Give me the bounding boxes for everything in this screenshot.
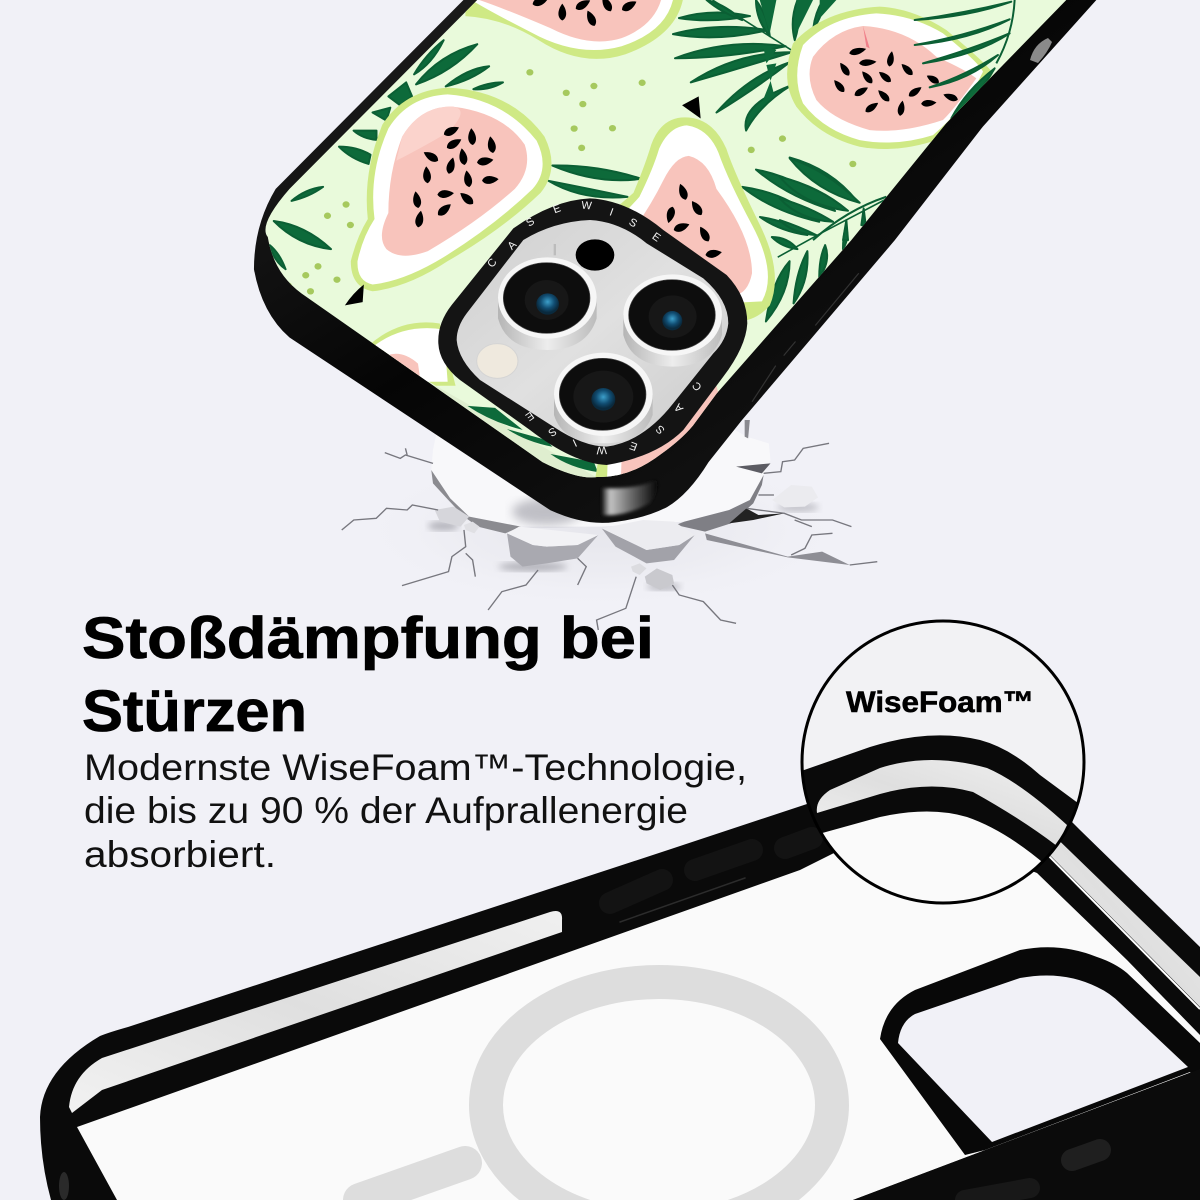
left lower port (59, 1172, 69, 1200)
top phone with patterned case (250, 0, 1120, 523)
impact highlight on phone corner (601, 480, 658, 515)
body text (84, 747, 747, 875)
body text: Modernste WiseFoam™-Technologie, (84, 747, 747, 788)
CASEWISE lettering: I (571, 436, 578, 448)
heading (82, 606, 654, 744)
illustration: cracked wall impact (342, 400, 877, 630)
phone case body (254, 0, 1096, 523)
CASEWISE lettering: W (596, 443, 607, 456)
CASEWISE lettering: S (524, 215, 537, 229)
black stems (345, 96, 701, 305)
CASEWISE lettering: W (581, 200, 593, 212)
camera plate (457, 220, 728, 447)
lens top right (623, 274, 722, 367)
callout ring (802, 621, 1084, 903)
papaya: right, with frond (760, 0, 1015, 240)
body text: absorbiert. (84, 834, 276, 875)
papaya: centre right (620, 117, 775, 320)
heading: Stürzen (82, 679, 307, 744)
dots (285, 69, 856, 295)
callout label: WiseFoam™ (846, 686, 1034, 719)
body text: die bis zu 90 % der Aufprallenergie (84, 790, 688, 831)
CASEWISE lettering: S (654, 422, 668, 436)
CASEWISE lettering: E (650, 230, 663, 244)
papaya: top (465, 0, 683, 59)
magnified case corner (804, 735, 1077, 870)
flash (477, 344, 518, 378)
bottom stripes (432, 386, 720, 482)
papaya: bottom left (369, 322, 456, 386)
bottom rim (853, 1069, 1200, 1200)
case pattern (266, 0, 1066, 478)
heading: Stoßdämpfung bei (82, 606, 654, 671)
foam window left (69, 911, 562, 1113)
zoom callout: WiseFoam (800, 620, 1086, 904)
foam window right (1040, 822, 1200, 1007)
CASEWISE lettering: E (523, 409, 536, 423)
CASEWISE lettering (485, 200, 705, 456)
port (1072, 1150, 1100, 1160)
CASEWISE lettering: A (506, 238, 520, 253)
CASEWISE lettering: A (672, 400, 686, 414)
side buttons (610, 838, 812, 922)
side button highlight (1030, 38, 1052, 63)
CASEWISE lettering: I (608, 206, 615, 219)
CASEWISE lettering: S (627, 216, 639, 230)
palm leaves (270, 0, 890, 321)
microphone pin (554, 244, 556, 255)
transparent back (77, 820, 1200, 1200)
CASEWISE lettering: E (628, 439, 639, 453)
camera cut-out (880, 947, 1200, 1155)
lens top left (498, 257, 597, 350)
lens bottom (554, 353, 653, 443)
CASEWISE lettering: C (485, 256, 500, 270)
CASEWISE lettering: E (552, 202, 562, 216)
camera hole (576, 239, 614, 271)
side buttons (752, 273, 859, 402)
CASEWISE lettering: S (546, 424, 558, 438)
CASEWISE lettering: C (690, 379, 705, 393)
foam edge highlight (1040, 847, 1200, 1009)
power button (965, 1188, 1030, 1200)
camera island (438, 198, 747, 465)
magnet alignment pill (360, 1163, 465, 1200)
papaya: centre left (351, 88, 552, 291)
magnetic ring (486, 982, 832, 1200)
case frame (40, 803, 1200, 1200)
bottom phone case (40, 803, 1200, 1200)
